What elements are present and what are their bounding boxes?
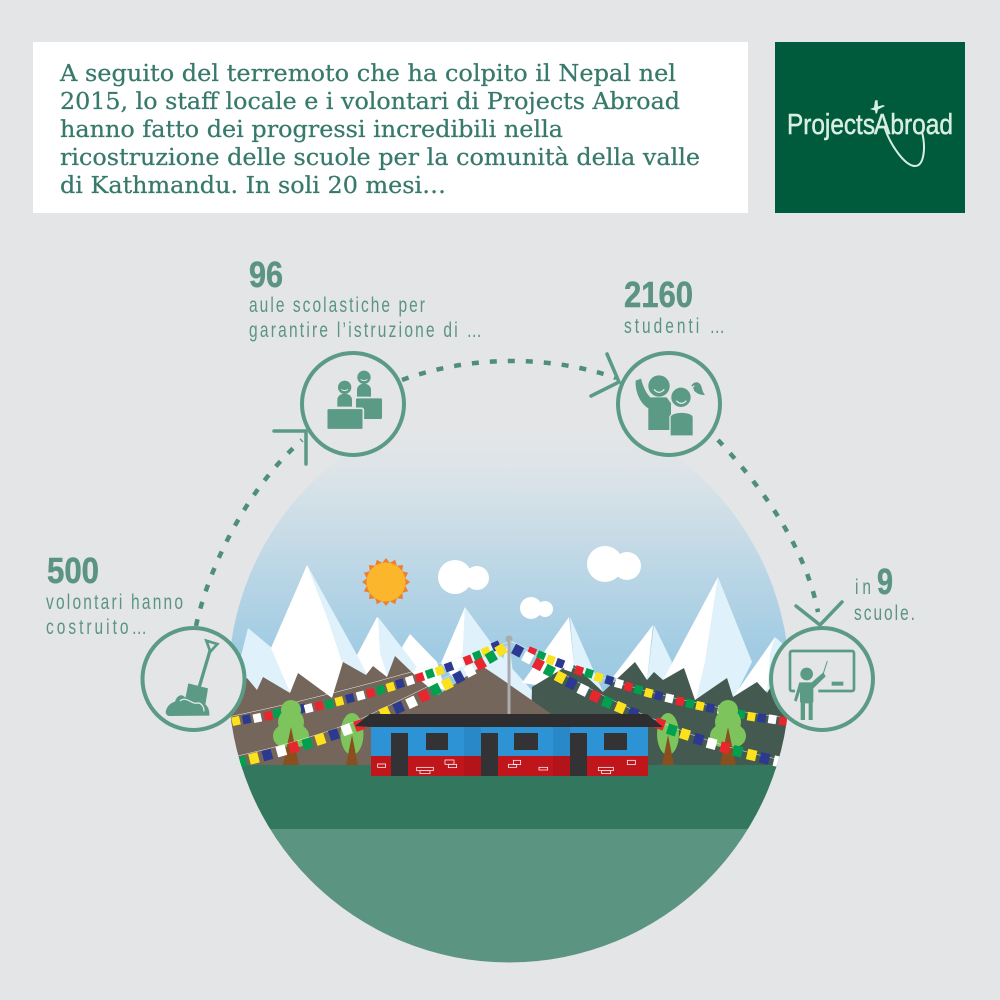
arrow: classrooms to students [402, 354, 619, 396]
sun [362, 558, 410, 606]
icon: students [618, 353, 720, 455]
intro text panel: ricostruzione delle scuole per la comunità della valle [60, 145, 700, 171]
stat: 96 classrooms: aule scolastiche per [249, 292, 425, 317]
prayer flags: lower strings [236, 641, 790, 768]
stat: 9 schools: in [855, 574, 871, 599]
sky [230, 477, 787, 769]
snowy mountains [235, 565, 790, 705]
scene: village illustration in circle [230, 477, 787, 962]
walls [371, 727, 648, 776]
intro text panel [33, 42, 748, 213]
stat: 96 classrooms [249, 254, 482, 342]
school building [355, 714, 663, 776]
intro text panel: A seguito del terremoto che ha colpito il Nepal nel [59, 61, 676, 87]
stat: 9 schools [854, 561, 915, 625]
intro text panel: di Kathmandu. In soli 20 mesi… [60, 173, 446, 199]
stat: 96 classrooms: 96 [249, 254, 283, 295]
stat: 2160 students [624, 274, 725, 338]
dark green hills [530, 662, 795, 770]
stat: 9 schools: scuole. [854, 600, 915, 625]
icon: teacher at blackboard [771, 628, 873, 730]
prayer flags: upper strings [230, 640, 790, 726]
stat: 500 volunteers: volontari hanno [46, 589, 183, 614]
stat: 96 classrooms: garantire l’istruzione di … [249, 317, 482, 342]
logo panel: Projects Abroad: Abroad [874, 109, 953, 141]
stat: 2160 students: studenti … [624, 313, 725, 338]
logo panel: Projects Abroad: Projects [787, 109, 875, 141]
arrow: volunteers to classrooms [196, 431, 306, 626]
doors and windows [391, 733, 627, 776]
intro text panel: hanno fatto dei progressi incredibili nella [60, 117, 563, 143]
brown hills [228, 656, 550, 770]
stat: 500 volunteers: 500 [47, 550, 99, 591]
ground [228, 765, 790, 829]
lake foreground [270, 829, 748, 962]
icon: shovel [142, 628, 244, 730]
roof [355, 714, 663, 727]
stat: 500 volunteers [46, 550, 183, 639]
intro text panel: 2015, lo staff locale e i volontari di Projects Abroad [60, 89, 680, 115]
stat: 500 volunteers: costruito… [46, 614, 147, 639]
logo panel: Projects Abroad [775, 42, 965, 213]
stat: 2160 students: 2160 [624, 274, 693, 315]
arrow: students to schools [718, 440, 842, 625]
bricks [378, 760, 457, 774]
clouds [438, 546, 641, 619]
trees [273, 700, 746, 765]
stat: 9 schools: 9 [877, 561, 893, 602]
icon: classroom desks [302, 353, 404, 455]
flag pole [506, 636, 512, 715]
